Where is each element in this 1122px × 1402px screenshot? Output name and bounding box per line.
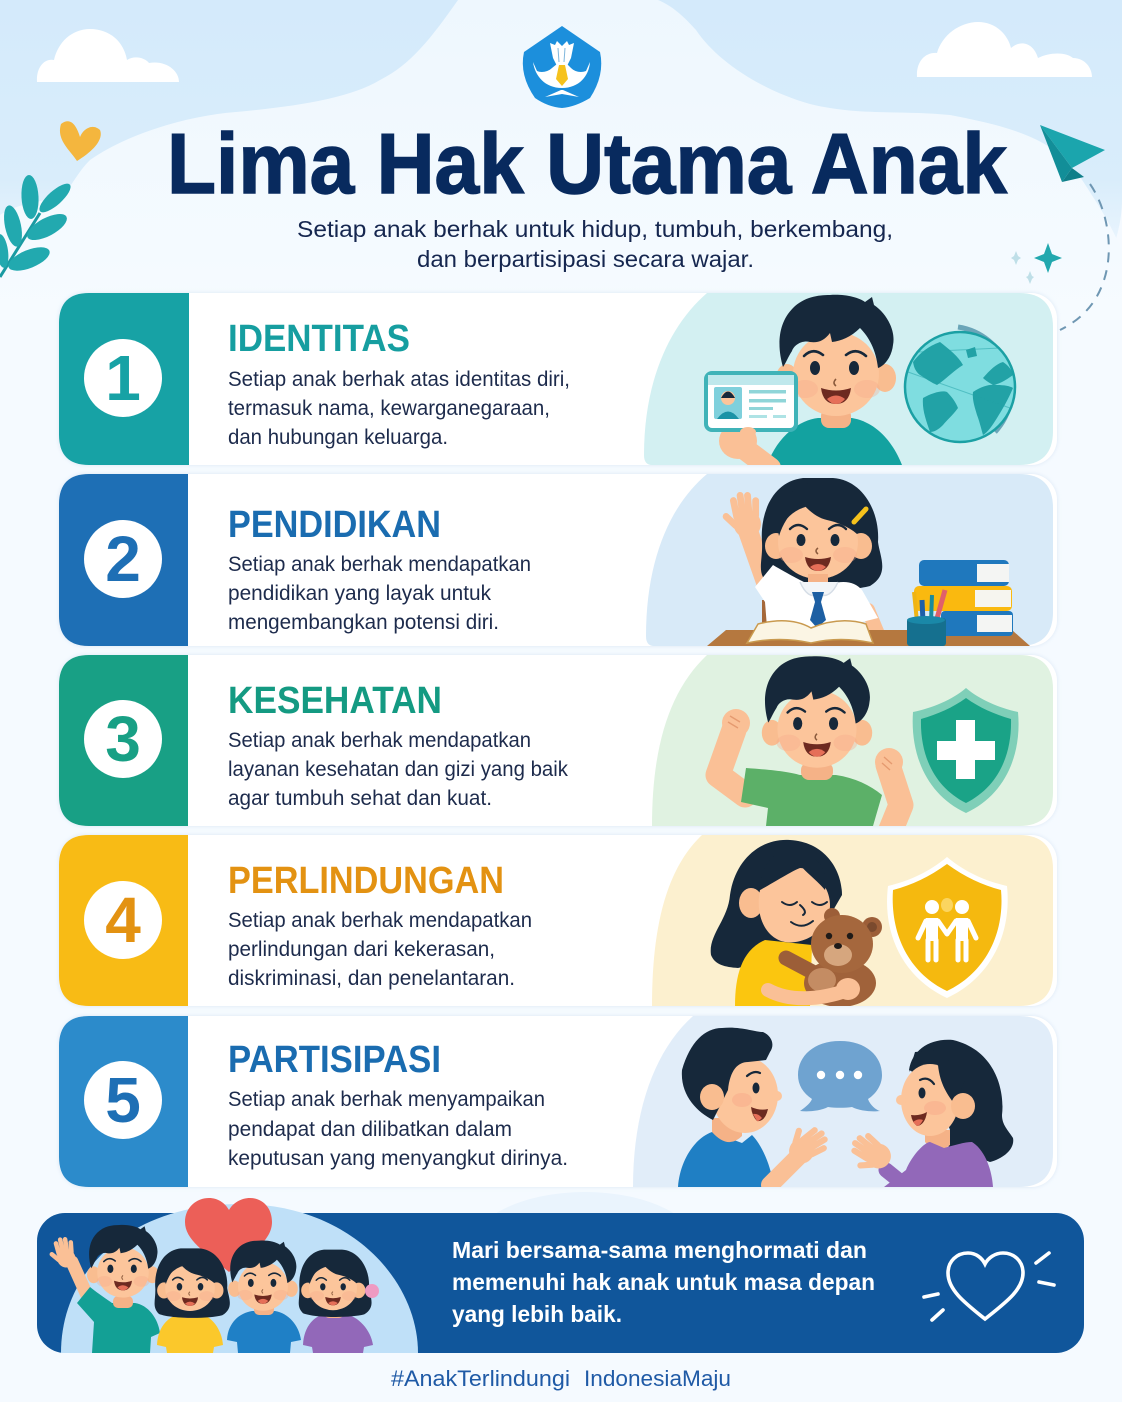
panel: 1 identitas: Setiap anak berhak atas identitas diri, (228, 368, 570, 391)
panel: 1 identitas (59, 293, 1057, 468)
panel: 5 partisipasi: PARTISIPASI (228, 1039, 441, 1081)
illustration: boy with ID card (706, 295, 902, 468)
panel: 5 partisipasi: Setiap anak berhak menyampaikan (228, 1088, 545, 1111)
cloud right (917, 22, 1092, 77)
icon: sparkles (1011, 243, 1062, 284)
background sky (0, 0, 1122, 290)
banner text: memenuhi hak anak untuk masa depan (452, 1269, 875, 1295)
panel: 3 kesehatan: KESEHATAN (228, 680, 442, 722)
panel: 1 identitas: IDENTITAS (228, 318, 410, 360)
icon: outline heart with rays (924, 1253, 1054, 1320)
icon: health shield (913, 688, 1019, 813)
icon: stack of books and pencil cup (907, 560, 1013, 646)
banner arch (61, 1204, 418, 1353)
icon: leaf sprig (0, 175, 75, 277)
icon: red heart (185, 1198, 272, 1272)
decorative faint arch behind banner (470, 1192, 700, 1308)
panel: 2 pendidikan: Setiap anak berhak mendapatkan (228, 553, 531, 576)
panel: 2 pendidikan (59, 474, 1057, 646)
panel: 2 pendidikan: pendidikan yang layak untuk (228, 582, 491, 605)
panel: 5 partisipasi (59, 1016, 1057, 1187)
banner text: yang lebih baik. (452, 1301, 622, 1327)
hashtag footer (391, 1366, 731, 1391)
icon: yellow heart (60, 121, 101, 161)
background blob (0, 0, 1122, 320)
panel: 2 pendidikan: mengembangkan potensi diri. (228, 611, 499, 634)
panel: 4 perlindungan: 4 (105, 884, 141, 956)
illustration: boy talking (678, 1028, 830, 1187)
illustration: strong boy (718, 656, 903, 832)
panel: 4 perlindungan: perlindungan dari kekerasan, (228, 938, 495, 961)
banner (37, 1198, 1084, 1353)
panel: 4 perlindungan: Setiap anak berhak mendapatkan (228, 909, 532, 932)
subtitle (297, 216, 893, 272)
panel: 5 partisipasi: 5 (105, 1064, 141, 1136)
panel: 5 partisipasi: keputusan yang menyangkut dirinya. (228, 1147, 568, 1170)
panel: 4 perlindungan: diskriminasi, dan penelantaran. (228, 967, 515, 990)
hashtag footer: #AnakTerlindungi (391, 1366, 570, 1391)
panel: 5 partisipasi: pendapat dan dilibatkan dalam (228, 1118, 512, 1141)
panel: 1 identitas: termasuk nama, kewarganegaraan, (228, 397, 550, 420)
panel: 3 kesehatan (59, 655, 1057, 832)
panel: 1 identitas: dan hubungan keluarga. (228, 426, 448, 449)
icon: protection shield (887, 857, 1008, 998)
hashtag footer: IndonesiaMaju (584, 1366, 731, 1391)
title: Lima Hak Utama Anak (167, 117, 1008, 212)
illustration: four children (49, 1225, 379, 1353)
illustration: girl hugging teddy bear (711, 840, 882, 1007)
illustration: girl talking (846, 1040, 1013, 1187)
subtitle: Setiap anak berhak untuk hidup, tumbuh, berkembang, (297, 216, 893, 242)
panel: 1 identitas: 1 (105, 342, 141, 414)
panel: 3 kesehatan: Setiap anak berhak mendapatkan (228, 729, 531, 752)
illustration: girl at desk with books (707, 478, 1030, 646)
logo emblem (523, 26, 601, 108)
dashed flight path (1060, 184, 1109, 330)
icon: paper plane (1040, 125, 1105, 182)
icon: globe (905, 327, 1015, 442)
banner text: Mari bersama-sama menghormati dan (452, 1237, 867, 1263)
panel: 4 perlindungan: PERLINDUNGAN (228, 860, 504, 902)
panel: 4 perlindungan (59, 835, 1057, 1007)
banner text (452, 1237, 875, 1327)
panel: 3 kesehatan: agar tumbuh sehat dan kuat. (228, 787, 492, 810)
icon: speech bubble (798, 1041, 882, 1111)
panel: 3 kesehatan: layanan kesehatan dan gizi yang baik (228, 758, 568, 781)
panel: 2 pendidikan: 2 (105, 523, 141, 595)
cloud left (37, 29, 179, 82)
panel: 2 pendidikan: PENDIDIKAN (228, 504, 441, 546)
panel: 3 kesehatan: 3 (105, 703, 141, 775)
subtitle: dan berpartisipasi secara wajar. (417, 246, 754, 272)
